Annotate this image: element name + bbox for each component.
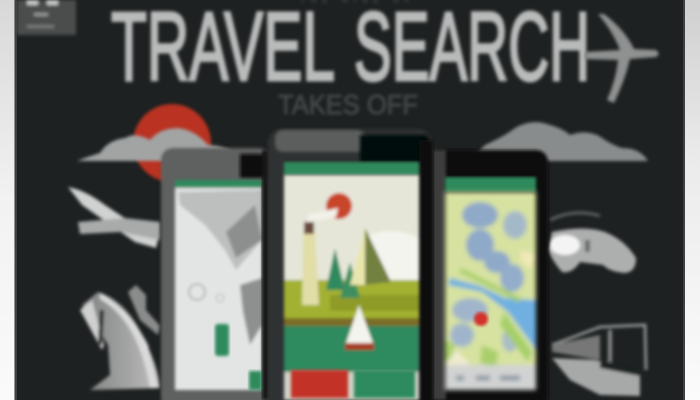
sailboat (346, 305, 373, 343)
subtitle: TAKES OFF (278, 89, 418, 120)
red button (291, 370, 348, 398)
left phone (161, 148, 271, 400)
right phone screen: city map (445, 192, 536, 390)
logo badge (17, 0, 76, 35)
red sun on screen (326, 193, 352, 219)
left phone screen: world map (175, 180, 262, 390)
icon: cloud left (77, 128, 245, 161)
icon: cruise ship (80, 285, 160, 390)
map pin (474, 312, 488, 326)
icon: airplane top right (585, 14, 658, 103)
lighthouse (302, 232, 319, 305)
mountains (362, 228, 391, 285)
green map marker (215, 324, 229, 356)
icon: red sun (133, 104, 211, 182)
center phone header (284, 162, 419, 175)
icon: airplane left (68, 187, 160, 248)
icon: train (552, 325, 646, 396)
green trees (326, 248, 345, 290)
green map button (249, 371, 262, 390)
icon: car (548, 213, 636, 273)
right phone (430, 150, 548, 400)
icon: cloud right (470, 122, 648, 161)
right phone header (445, 177, 536, 192)
center phone (268, 129, 433, 400)
green button (354, 370, 415, 398)
center phone screen: landscape (284, 175, 419, 400)
